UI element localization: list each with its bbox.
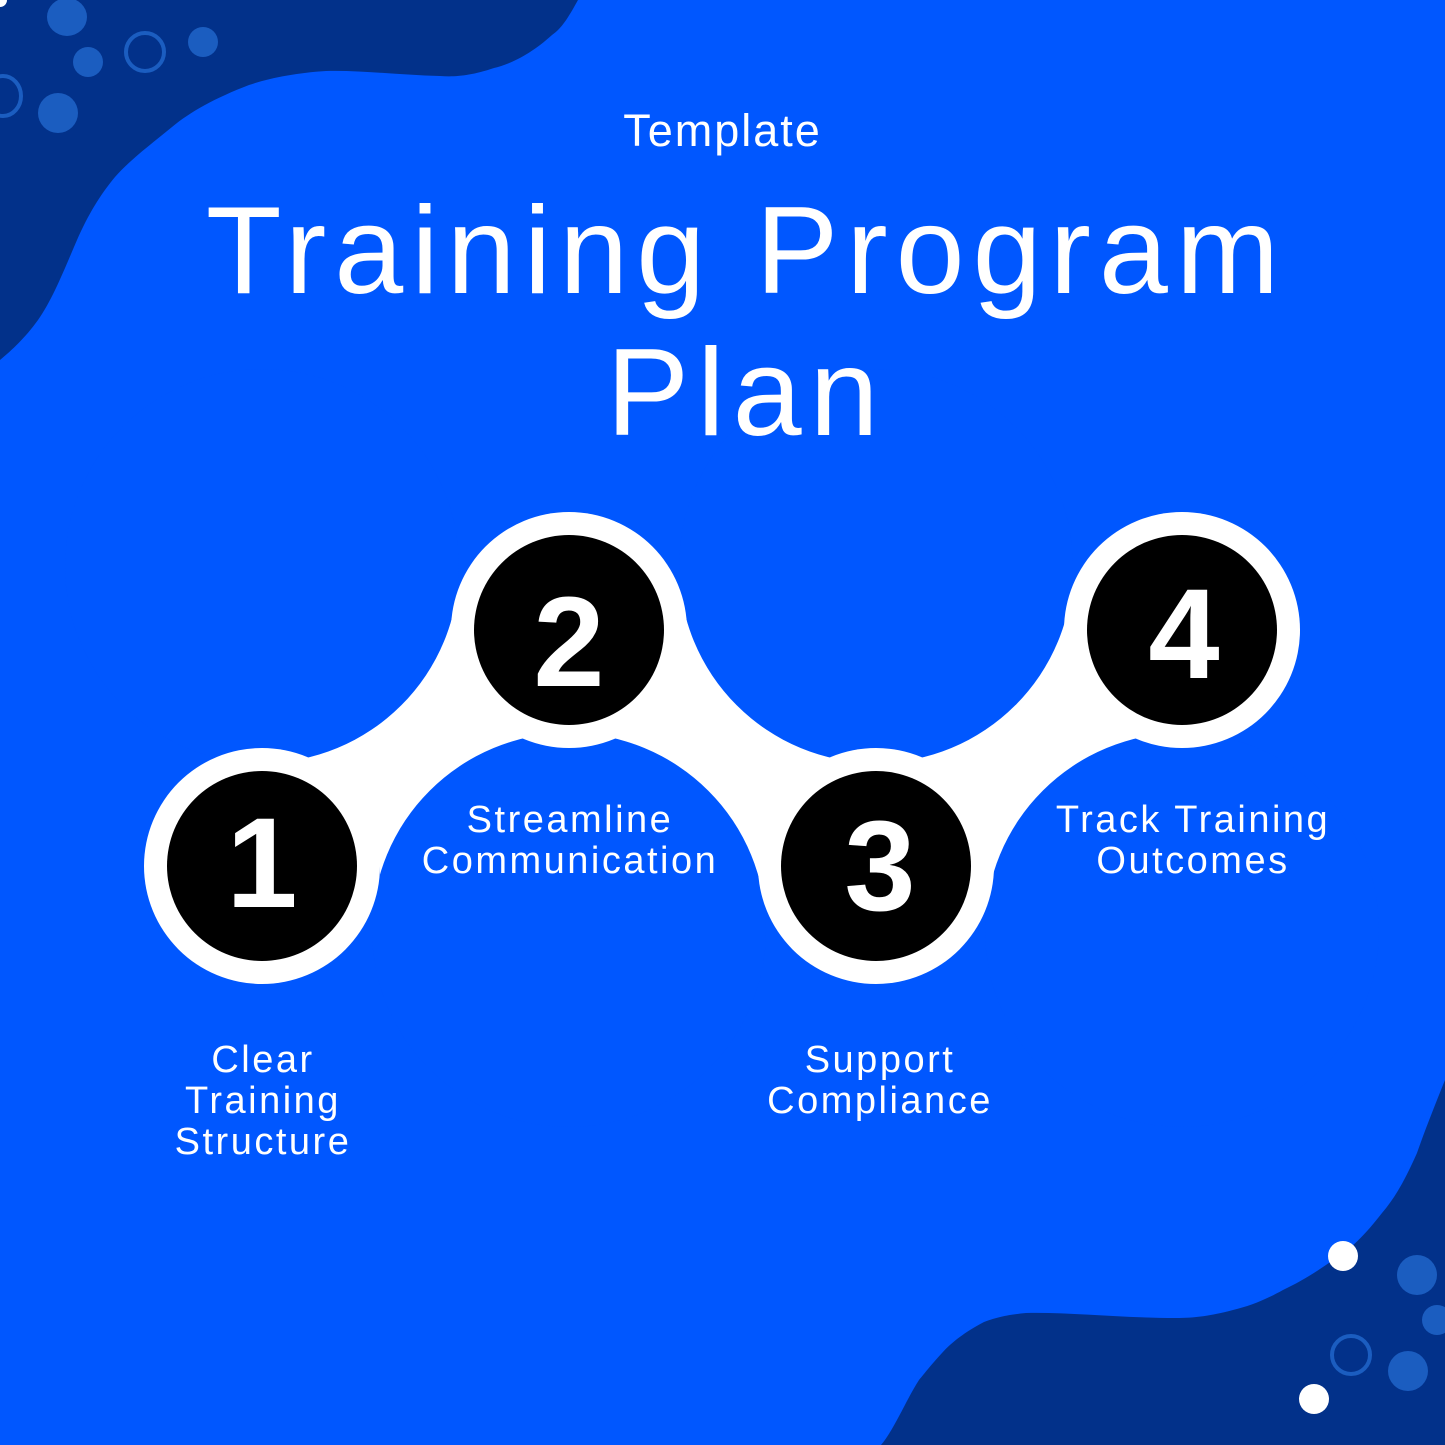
label: step 3 [767,1039,993,1122]
title: Plan [606,324,887,462]
title [206,182,1287,462]
label: step 1: Structure [175,1121,351,1163]
title: Training Program [206,182,1287,320]
label: step 3: Support [805,1039,955,1081]
step 2 circle [451,512,687,748]
label: step 3: Compliance [767,1080,993,1122]
subtitle: Template [623,105,822,156]
label: step 2 [422,799,718,882]
label: step 2: Communication [422,840,718,882]
decoration: bottom-right blob [881,1080,1445,1445]
step 3 circle [758,748,994,984]
decoration: top-left blob [0,0,578,360]
step 1 circle: 1 [226,792,298,935]
label: step 1 [175,1039,351,1163]
label: step 1: Training [185,1080,341,1122]
step 4 circle: 4 [1148,563,1220,706]
label: step 4 [1056,799,1330,882]
step 4 circle [1064,512,1300,748]
label: step 4: Outcomes [1096,840,1290,882]
label: step 4: Track Training [1056,799,1330,841]
label: step 1: Clear [211,1039,315,1081]
label: step 2: Streamline [467,799,673,841]
step 2 circle: 2 [533,571,605,714]
step path connector [65,369,1379,1127]
step 1 circle [144,748,380,984]
step 3 circle: 3 [844,795,916,938]
